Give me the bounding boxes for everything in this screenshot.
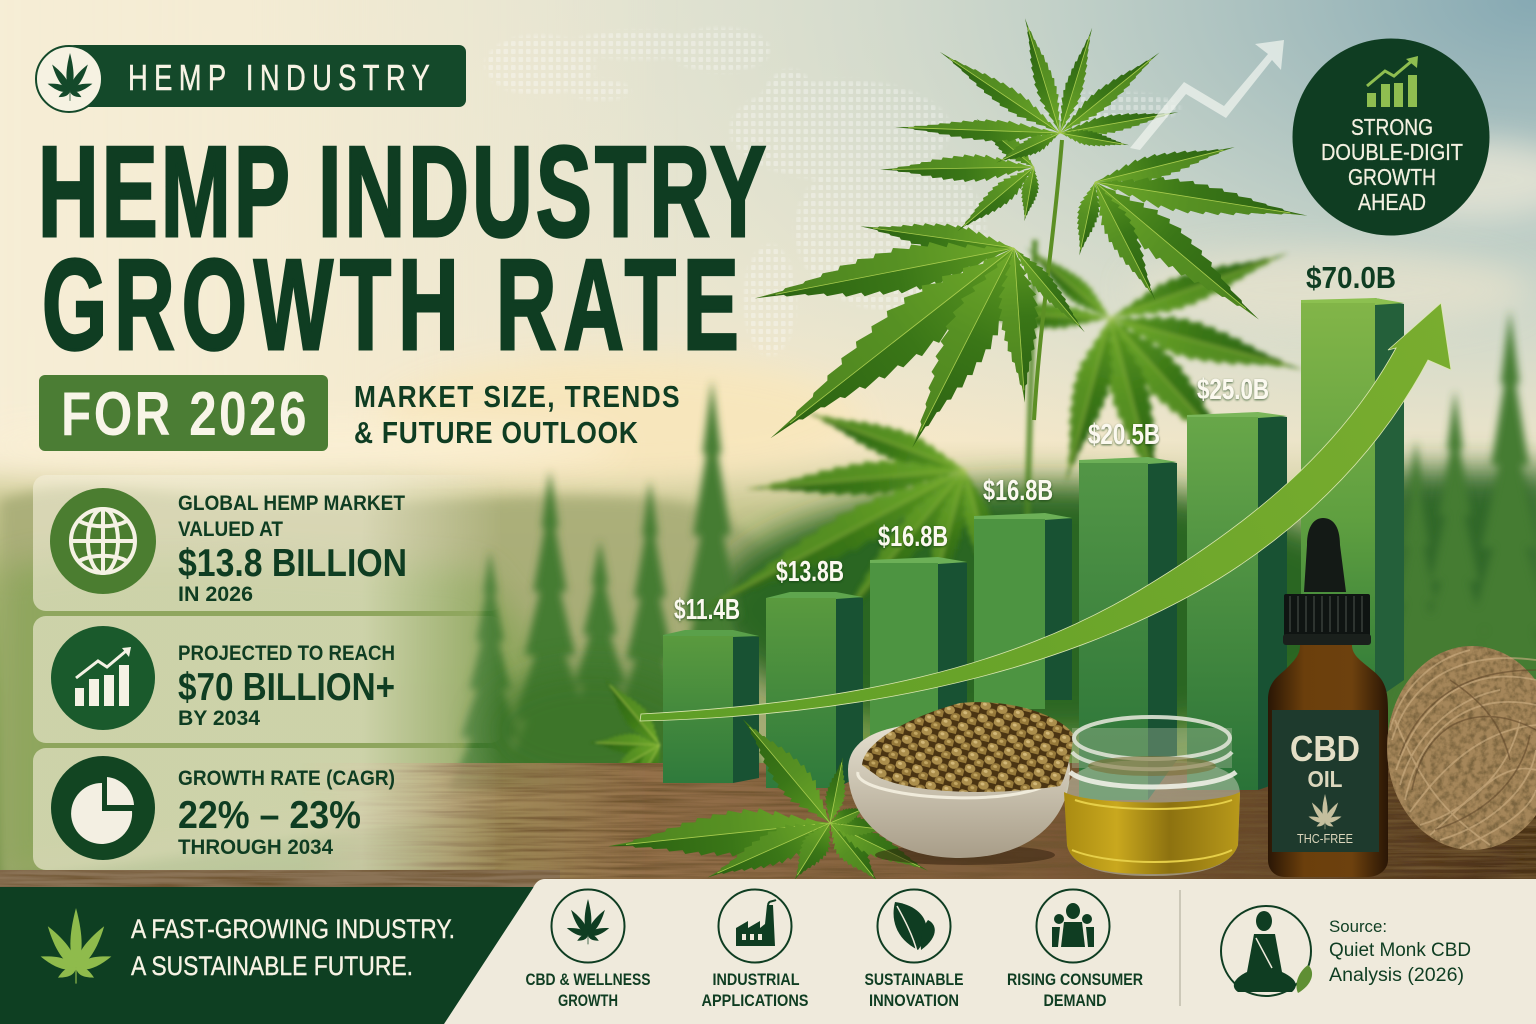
title: GROWTH RATE xyxy=(42,234,739,377)
world map dot pattern xyxy=(470,20,1190,360)
subtitle xyxy=(354,380,680,451)
hemp leaf on table xyxy=(606,708,933,894)
bar 4: $16.8B xyxy=(983,475,1053,507)
icon: globe xyxy=(50,488,156,594)
panel: market value: VALUED AT xyxy=(178,518,283,541)
feature: industrial: APPLICATIONS xyxy=(702,991,808,1010)
footer panel xyxy=(444,879,1536,1024)
badge: hemp industry xyxy=(36,45,466,112)
source note: Source: xyxy=(1329,917,1387,936)
top leaf xyxy=(895,15,1180,171)
bar 4 xyxy=(974,475,1072,709)
feature: industrial xyxy=(702,890,808,1010)
bar 2 xyxy=(766,556,863,788)
source note xyxy=(1329,917,1471,986)
feature: consumer demand: DEMAND xyxy=(1044,991,1106,1010)
badge: double digit growth xyxy=(1292,38,1490,236)
panel: projection xyxy=(33,616,503,743)
bar 7: $70.0B xyxy=(1306,260,1396,295)
icon: pie chart xyxy=(51,756,155,860)
feature: industrial: INDUSTRIAL xyxy=(712,970,800,989)
panel: growth rate: GROWTH RATE (CAGR) xyxy=(178,767,395,790)
bar 2: $13.8B xyxy=(776,556,844,588)
panel: growth rate: 22% – 23% xyxy=(178,794,361,837)
bar 1: $11.4B xyxy=(674,594,740,626)
feature: sustainable xyxy=(864,890,964,1010)
icon: small chart xyxy=(1367,56,1418,107)
bar 5: $20.5B xyxy=(1088,419,1160,451)
icon: quiet monk xyxy=(1221,906,1312,996)
bowl of hemp seeds xyxy=(848,702,1074,865)
feature: CBD and wellness: GROWTH xyxy=(558,991,618,1010)
feature: sustainable: INNOVATION xyxy=(869,991,959,1010)
bar 3 xyxy=(870,521,967,741)
bottle label: CBD xyxy=(1290,728,1360,769)
wood table xyxy=(0,763,1536,888)
title: HEMP INDUSTRY xyxy=(38,121,766,264)
foreground left leaf blur xyxy=(590,672,669,793)
bar chart xyxy=(663,260,1404,800)
blurred hills and forest xyxy=(0,310,1536,880)
growth arrow behind plant xyxy=(1130,40,1284,150)
footer banner: tagline xyxy=(0,887,534,1024)
feature: consumer demand: RISING CONSUMER xyxy=(1007,970,1143,989)
bar 7 xyxy=(1301,260,1404,700)
CBD oil bottle xyxy=(1268,518,1388,877)
feature: CBD and wellness: CBD & WELLNESS xyxy=(526,970,650,989)
bar 6: $25.0B xyxy=(1197,374,1269,406)
ball of hemp twine xyxy=(1387,646,1536,850)
panel: projection: $70 BILLION+ xyxy=(178,666,395,709)
badge: double digit growth: STRONG xyxy=(1351,114,1433,140)
panel: growth rate: THROUGH 2034 xyxy=(178,836,333,859)
bottle label: OIL xyxy=(1308,766,1342,792)
bar 3: $16.8B xyxy=(878,521,948,553)
source note: Quiet Monk CBD xyxy=(1329,940,1471,961)
feature: consumer demand xyxy=(1007,890,1143,1010)
badge: double digit growth: DOUBLE-DIGIT xyxy=(1321,139,1463,165)
icon: green hemp leaf xyxy=(39,908,113,984)
badge: hemp industry: HEMP INDUSTRY xyxy=(128,57,430,98)
panel: projection: BY 2034 xyxy=(178,707,260,730)
bottle label: THC-FREE xyxy=(1297,831,1353,846)
glass jar of oil xyxy=(1064,717,1240,876)
middle left leaf xyxy=(880,111,1043,240)
panel: market value: $13.8 BILLION xyxy=(178,542,407,585)
bar 6 xyxy=(1187,374,1287,790)
main hemp plant xyxy=(750,15,1310,461)
bar 1 xyxy=(663,594,759,783)
blurred background hemp leaves xyxy=(691,238,1308,634)
footer banner: tagline: A SUSTAINABLE FUTURE. xyxy=(131,951,413,981)
feature: CBD and wellness xyxy=(526,890,650,1010)
panel: market value: IN 2026 xyxy=(178,583,253,606)
panel: market value xyxy=(33,475,503,611)
footer banner: tagline: A FAST-GROWING INDUSTRY. xyxy=(131,914,455,944)
title xyxy=(38,121,766,377)
badge: double digit growth: AHEAD xyxy=(1358,189,1426,215)
bar 5 xyxy=(1079,419,1177,800)
badge: double digit growth: GROWTH xyxy=(1348,164,1436,190)
feature: sustainable: SUSTAINABLE xyxy=(864,970,964,989)
panel: growth rate xyxy=(33,748,503,870)
icon: rising chart xyxy=(51,626,155,730)
panel: market value: GLOBAL HEMP MARKET xyxy=(178,492,405,515)
source note: Analysis (2026) xyxy=(1329,965,1464,986)
middle right leaf xyxy=(1069,135,1310,335)
panel: projection: PROJECTED TO REACH xyxy=(178,642,395,665)
bottle label xyxy=(1272,710,1379,852)
subtitle: MARKET SIZE, TRENDS xyxy=(354,380,680,415)
curved growth arrow xyxy=(640,303,1451,721)
big lower leaf xyxy=(750,212,1092,461)
subtitle: & FUTURE OUTLOOK xyxy=(354,416,638,451)
year badge: FOR 2026 xyxy=(61,379,307,448)
